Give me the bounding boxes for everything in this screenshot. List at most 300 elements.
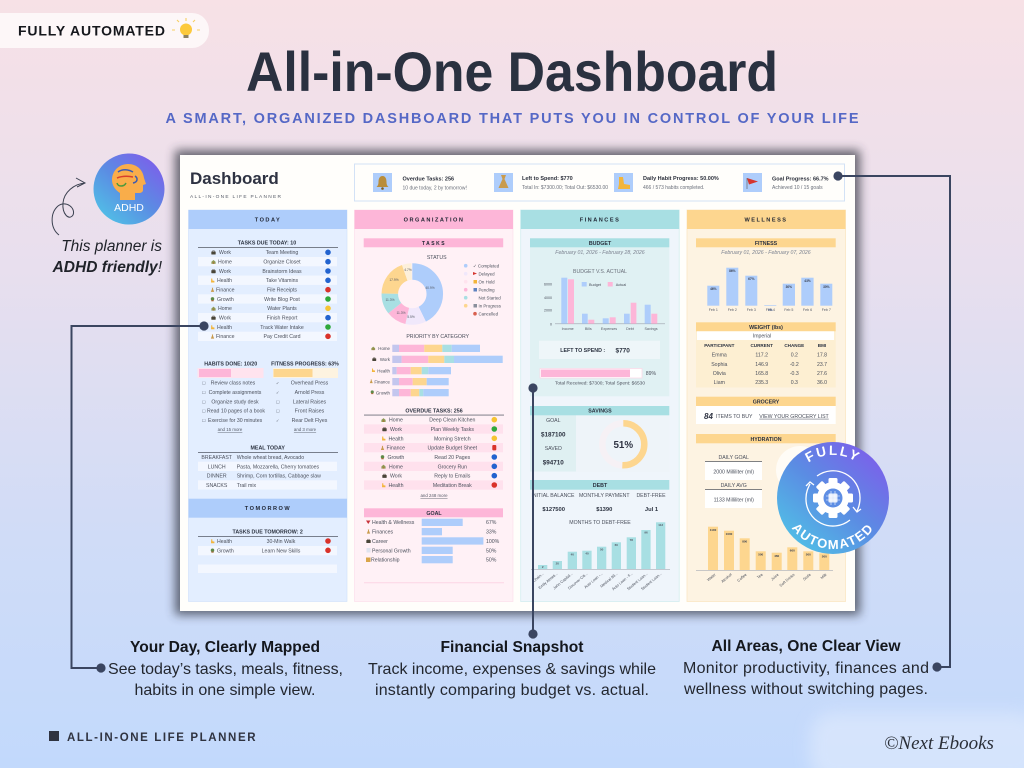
panel: summary strip: Achieved 10 / 15 goals bbox=[772, 185, 823, 191]
table: weight: 0.2 bbox=[791, 352, 798, 358]
section: savings: GOAL bbox=[546, 418, 561, 424]
table: tasks due today: Team Meeting bbox=[266, 250, 298, 256]
chart: fitness bars: 43% bbox=[804, 279, 811, 283]
chart: goal progress: 100% bbox=[486, 539, 500, 545]
table: tasks due today: Home bbox=[218, 306, 232, 312]
checklist: fitness: Rear Delt Flyes bbox=[292, 418, 328, 424]
arrow: curl pointing at ADHD badge bbox=[52, 178, 85, 235]
chart: months to debt-free bars: Discover Citi... bbox=[567, 572, 589, 591]
chart: priority by category stacked bars: Finance bbox=[374, 379, 391, 384]
heading: dashboard: Dashboard bbox=[190, 169, 279, 188]
table: tasks due today: Growth bbox=[217, 297, 234, 303]
section: fitness bbox=[696, 238, 836, 312]
chart: budget vs actual bars: Actual bbox=[616, 283, 626, 287]
chart: fitness bars: Feb 4 bbox=[766, 308, 775, 312]
table: tasks due tomorrow bbox=[198, 530, 338, 573]
section: debt: DEBT bbox=[593, 483, 608, 489]
table: overdue tasks: OVERDUE TASKS: 256 bbox=[405, 408, 463, 414]
chart: fitness bars: 46% bbox=[710, 287, 717, 291]
panel: summary strip: 466 / 573 habits completed. bbox=[643, 185, 704, 191]
table: meal today: MEAL TODAY bbox=[251, 446, 285, 452]
chart: months to debt-free bars: 2 bbox=[542, 565, 544, 569]
checklist: habits: HABITS DONE: 10/20 bbox=[204, 362, 257, 368]
chart: hydration bars: 500 bbox=[822, 554, 827, 558]
chart: hydration bars: Tea bbox=[756, 572, 764, 580]
chart: goal progress: Relationship bbox=[371, 558, 400, 564]
table: weight: CURRENT bbox=[750, 343, 773, 348]
table: tasks due tomorrow: 30-Min Walk bbox=[267, 539, 296, 545]
chart: priority by category stacked bars bbox=[370, 345, 503, 396]
icon: red flag bbox=[743, 173, 762, 192]
checklist: habits: ☐ bbox=[202, 409, 206, 414]
heading: tomorrow: TOMORROW bbox=[245, 506, 291, 512]
table: tasks due today: Health bbox=[217, 325, 232, 331]
table: overdue tasks: Update Budget Sheet bbox=[427, 446, 478, 452]
table: meal today: DINNER bbox=[207, 474, 227, 480]
table: overdue tasks: Work bbox=[390, 427, 402, 433]
legend: task status: On Hold bbox=[478, 279, 495, 284]
table: weight: 146.9 bbox=[755, 362, 768, 368]
heading: dashboard bbox=[190, 169, 282, 200]
chart: priority by category stacked bars: Growth bbox=[376, 390, 391, 395]
chart: hydration bars: 600 bbox=[790, 548, 795, 552]
chart: savings donut: 51% bbox=[613, 440, 633, 451]
legend: task status: Pending bbox=[478, 287, 495, 292]
callout: ADHD friendly: This planner is bbox=[61, 238, 162, 255]
section: hydration bbox=[696, 434, 836, 588]
table: overdue tasks: Reply to Emails bbox=[434, 474, 471, 480]
checklist: fitness: ✓ bbox=[276, 390, 279, 395]
chart: goal progress: GOAL bbox=[426, 511, 442, 517]
table: tasks due today: Work bbox=[219, 250, 231, 256]
table: weight: BMI bbox=[818, 343, 826, 348]
section: budget: BUDGET V.S. ACTUAL bbox=[573, 269, 627, 275]
panel: dashboard screenshot bbox=[180, 155, 855, 611]
section: savings: $94710 bbox=[543, 460, 564, 466]
connector: financial snapshot bbox=[528, 383, 538, 639]
chart: hydration bars: Soft Drinks bbox=[779, 573, 796, 588]
table: overdue tasks: and 248 more bbox=[420, 493, 448, 498]
chart: hydration bars: 500 bbox=[806, 552, 811, 556]
table: tasks due tomorrow: Learn New Skills bbox=[262, 548, 301, 554]
table: weight: 0.3 bbox=[791, 380, 798, 386]
chart: status donut bbox=[385, 268, 435, 319]
table: weight: 23.7 bbox=[817, 362, 827, 368]
text block: all areas, one clear view: Monitor productivity, finances and bbox=[683, 660, 929, 677]
legend: task status: Cancelled bbox=[478, 311, 499, 316]
section: savings: $187100 bbox=[541, 432, 566, 438]
chart: months to debt-free bars: Auto Loan -... bbox=[584, 572, 604, 589]
chart: fitness bars: 67% bbox=[748, 277, 755, 281]
chart: goal progress: 67% bbox=[486, 520, 497, 526]
chart: months to debt-free bars: 40 bbox=[571, 552, 574, 556]
table: weight: Olivia bbox=[713, 371, 726, 377]
checklist: fitness: ✓ bbox=[276, 418, 279, 423]
chart: hydration bars: 500 bbox=[758, 552, 764, 556]
badge: fully automated seal: AUTOMATED bbox=[792, 524, 872, 550]
chart: priority by category stacked bars: Home bbox=[378, 346, 391, 351]
table: meal today: LUNCH bbox=[208, 464, 226, 470]
table: tasks due today: Track Water Intake bbox=[260, 325, 304, 331]
chart: budget vs actual bars: Expenses bbox=[601, 327, 617, 331]
chart: fitness bars: Feb 2 bbox=[728, 308, 737, 312]
badge: fully automated: FULLY AUTOMATED bbox=[18, 22, 166, 38]
progress bar: spending: 89% bbox=[646, 371, 656, 377]
section: grocery: 84 bbox=[704, 412, 713, 421]
section: hydration: DAILY GOAL bbox=[719, 455, 749, 461]
table: tasks due today: Organize Closet bbox=[263, 260, 301, 266]
text block: financial snapshot: Financial Snapshot bbox=[441, 639, 583, 656]
table: tasks due today: Finance bbox=[216, 334, 235, 340]
chart: hydration bars: 1000 bbox=[726, 532, 733, 536]
chart: hydration bars: 1100 bbox=[710, 528, 717, 532]
section: debt: MONTHS TO DEBT-FREE bbox=[569, 520, 631, 526]
text block: your day, clearly mapped bbox=[108, 639, 343, 699]
chart: priority by category stacked bars: Health bbox=[377, 368, 391, 373]
table: overdue tasks: Meditation Break bbox=[433, 483, 472, 489]
chart: budget vs actual bars: Bills bbox=[585, 327, 592, 331]
checklist: fitness: Front Raises bbox=[295, 409, 325, 415]
chart: goal progress: Career bbox=[372, 539, 388, 545]
chart: hydration bars: 460 bbox=[774, 554, 780, 558]
heading: tomorrow bbox=[188, 499, 347, 518]
section: debt: INITIAL BALANCE bbox=[531, 493, 575, 499]
chart: budget vs actual bars: 2000 bbox=[544, 308, 552, 312]
checklist: habits: Read 10 pages of a book bbox=[207, 409, 265, 415]
chart: goal progress: Personal Growth bbox=[372, 548, 411, 554]
text block: financial snapshot: Track income, expenses & savings while bbox=[368, 661, 656, 678]
checklist: fitness: ✓ bbox=[276, 380, 279, 386]
chart: fitness bars: 86% bbox=[729, 269, 736, 273]
icon: ADHD head badge: ADHD bbox=[114, 202, 144, 214]
chart: hydration bars: Water bbox=[706, 572, 717, 582]
chart: hydration bars: 800 bbox=[742, 540, 748, 544]
section: budget bbox=[530, 238, 669, 396]
chart: months to debt-free bars: John Capital... bbox=[552, 572, 574, 590]
checklist: habits: Exercise for 30 minutes bbox=[208, 418, 263, 424]
table: weight: Liam bbox=[714, 380, 725, 386]
progress bar: spending: Total Received: $7300; Total Spent: $6530 bbox=[555, 380, 645, 386]
table: overdue tasks: Deep Clean Kitchen bbox=[429, 418, 475, 424]
chart: hydration bars: Alcohol bbox=[721, 573, 733, 584]
chart: months to debt-free bars: 40 bbox=[585, 552, 589, 556]
chart: months to debt-free bars: 96 bbox=[644, 531, 648, 535]
chart: months to debt-free bars: Medical Bil... bbox=[600, 572, 619, 589]
table: weight: 235.3 bbox=[755, 380, 768, 386]
panel: summary strip bbox=[354, 164, 844, 201]
badge: fully automated seal bbox=[777, 442, 889, 554]
checklist: fitness: Arnold Press bbox=[295, 390, 325, 396]
table: weight: WEIGHT (lbs) bbox=[749, 325, 783, 331]
table: tasks due tomorrow: Health bbox=[217, 539, 232, 545]
heading: tasks: TASKS bbox=[422, 241, 446, 247]
icon: bell bbox=[373, 173, 392, 192]
table: weight: Emma bbox=[712, 352, 727, 358]
chart: budget vs actual bars: Income bbox=[562, 327, 574, 331]
connector: day mapped bbox=[72, 321, 209, 673]
table: tasks due today: File Receipts bbox=[267, 288, 297, 294]
checklist: habits: ☐ bbox=[202, 418, 206, 423]
chart: budget vs actual bars: 6000 bbox=[544, 282, 552, 286]
chart: months to debt-free bars: Emily Almeti... bbox=[538, 572, 559, 590]
table: meal today: Trail mix bbox=[237, 483, 257, 489]
checklist: fitness bbox=[271, 362, 339, 432]
table: weight: 17.8 bbox=[817, 352, 827, 358]
chart: goal progress bbox=[364, 508, 504, 583]
section: hydration: 1133 Milliliter (ml) bbox=[714, 497, 754, 503]
chart: months to debt-free bars bbox=[531, 522, 670, 591]
panel: summary strip: Total In: $7300.00; Total Out: $6530.00 bbox=[522, 185, 608, 191]
panel: summary strip: 10 due today, 2 by tomorrow! bbox=[402, 186, 467, 192]
chart: months to debt-free bars: Auto Loan - F... bbox=[611, 572, 634, 591]
chart: status donut: 5.5% bbox=[407, 315, 415, 319]
heading: wellness: WELLNESS bbox=[744, 218, 788, 224]
watermark: next ebooks: ©Next Ebooks bbox=[884, 733, 994, 754]
chart: status donut: 4.7% bbox=[404, 268, 412, 272]
checklist: habits: ☐ bbox=[202, 380, 206, 386]
table: meal today: Whole wheat bread, Avocado bbox=[237, 455, 304, 461]
checklist: habits bbox=[198, 362, 265, 432]
stat: left to spend: LEFT TO SPEND : bbox=[560, 348, 605, 354]
icon: light bulb bbox=[172, 18, 200, 38]
chart: budget vs actual bars: Debt bbox=[626, 327, 634, 331]
chart: status donut: 11.3% bbox=[385, 298, 395, 302]
table: overdue tasks: Home bbox=[389, 418, 403, 424]
chart: months to debt-free bars: 20 bbox=[556, 562, 559, 566]
chart: months to debt-free bars: 78 bbox=[630, 538, 633, 542]
section: grocery bbox=[696, 397, 836, 424]
section: debt: $1390 bbox=[596, 507, 612, 513]
table: overdue tasks: Read 20 Pages bbox=[434, 455, 471, 461]
table: overdue tasks: Plan Weekly Tasks bbox=[431, 427, 474, 433]
text block: all areas, one clear view: wellness without switching pages. bbox=[683, 681, 928, 698]
table: overdue tasks: Growth bbox=[388, 455, 404, 461]
section: savings: SAVED bbox=[545, 446, 562, 452]
chart: fitness bars: Feb 1 bbox=[709, 308, 718, 312]
heading: today: TODAY bbox=[255, 218, 281, 224]
checklist: habits: Complete assignments bbox=[209, 390, 262, 396]
table: weight: PARTICIPANT bbox=[704, 343, 735, 348]
section: budget: BUDGET bbox=[589, 241, 612, 247]
panel: organization: STATUS bbox=[427, 255, 447, 261]
panel: summary strip: Left to Spend: $770 bbox=[522, 176, 573, 182]
table: overdue tasks: Health bbox=[388, 483, 404, 489]
panel: summary strip: Daily Habit Progress: 50.00% bbox=[643, 176, 719, 182]
callout: ADHD friendly: ADHD friendly! bbox=[52, 259, 163, 276]
text block: your day, clearly mapped: See today’s tasks, meals, fitness, bbox=[108, 661, 343, 678]
chart: budget vs actual bars: 0 bbox=[550, 322, 552, 326]
table: weight: -0.2 bbox=[790, 362, 799, 368]
panel: today bbox=[188, 210, 347, 602]
table: overdue tasks: Work bbox=[390, 474, 402, 480]
section: debt: Jul 1 bbox=[645, 507, 659, 513]
table: tasks due today: Brainstorm Ideas bbox=[262, 269, 302, 275]
chart: months to debt-free bars: 113 bbox=[658, 523, 663, 527]
table: tasks due today: Pay Credit Card bbox=[264, 334, 301, 340]
chart: hydration bars: Juice bbox=[770, 573, 780, 581]
table: overdue tasks: Morning Stretch bbox=[434, 436, 471, 442]
chart: goal progress: Finances bbox=[372, 530, 393, 536]
panel: wellness bbox=[687, 210, 846, 602]
heading: finances: FINANCES bbox=[580, 218, 620, 224]
section: hydration: HYDRATION bbox=[750, 437, 782, 443]
panel: dashboard screenshot shadow bbox=[175, 150, 860, 615]
panel: organization: PRIORITY BY CATEGORY bbox=[406, 334, 470, 340]
chart: months to debt-free bars: Student Loan... bbox=[640, 572, 663, 591]
table: overdue tasks bbox=[364, 408, 504, 498]
section: fitness: February 01, 2026 - February 07, 2026 bbox=[721, 250, 811, 256]
section: debt: MONTHLY PAYMENT bbox=[579, 493, 630, 499]
chart: months to debt-free bars: 60 bbox=[615, 543, 618, 547]
progress bar: spending bbox=[540, 368, 656, 386]
chart: status donut: 17.9% bbox=[389, 278, 399, 282]
text block: financial snapshot bbox=[368, 639, 656, 699]
chart: budget vs actual bars: Savings bbox=[644, 327, 658, 331]
section: debt bbox=[530, 480, 670, 591]
badge: fully automated seal: FULLY bbox=[804, 446, 860, 462]
checklist: fitness: ☐ bbox=[276, 409, 280, 414]
chart: goal progress: 50% bbox=[486, 548, 497, 554]
legend: task status: Not Started bbox=[478, 295, 501, 300]
section: grocery: GROCERY bbox=[753, 400, 780, 406]
chart: status donut: 40.9% bbox=[425, 286, 435, 290]
checklist: habits: Review class notes bbox=[211, 380, 256, 386]
chart: fitness bars: Feb 3 bbox=[747, 308, 756, 312]
text block: all areas, one clear view bbox=[683, 638, 929, 698]
table: meal today: Pasta, Mozzarella, Cherry tomatoes bbox=[237, 464, 320, 470]
chart: hydration bars: Coffee bbox=[737, 573, 748, 583]
section: savings: SAVINGS bbox=[588, 409, 612, 415]
callout: ADHD friendly bbox=[52, 238, 163, 276]
table: weight: -0.3 bbox=[790, 371, 799, 377]
chart: goal progress: Health & Wellness bbox=[372, 520, 415, 526]
legend: task status: ✓ Completed bbox=[473, 263, 500, 268]
text block: financial snapshot: instantly comparing budget vs. actual. bbox=[375, 682, 649, 699]
section: fitness: FITNESS bbox=[755, 241, 778, 247]
table: weight: 117.2 bbox=[755, 352, 768, 358]
section: debt: $127500 bbox=[542, 507, 565, 513]
table: tasks due today: Home bbox=[218, 260, 232, 266]
chart: hydration bars bbox=[696, 527, 833, 588]
table: tasks due today bbox=[198, 240, 338, 341]
table: tasks due today: Water Plants bbox=[267, 306, 297, 312]
table: meal today: SNACKS bbox=[206, 483, 228, 489]
section: hydration: DAILY AVG bbox=[721, 483, 747, 489]
icon: gear with cycle arrows bbox=[806, 471, 861, 526]
chart: fitness bars: 30% bbox=[823, 285, 830, 289]
legend: task status bbox=[464, 263, 502, 316]
icon: money bag bbox=[494, 173, 513, 192]
table: tasks due today: Take Vitamins bbox=[266, 278, 298, 284]
stat: left to spend bbox=[539, 341, 660, 359]
chart: fitness bars: Feb 5 bbox=[784, 308, 793, 312]
table: weight: Imperial bbox=[753, 334, 771, 340]
checklist: fitness: Lateral Raises bbox=[293, 399, 326, 405]
table: weight bbox=[696, 322, 836, 388]
table: tasks due today: Work bbox=[219, 269, 231, 275]
panel: summary strip: Overdue Tasks: 256 bbox=[402, 176, 454, 182]
text block: your day, clearly mapped: habits in one simple view. bbox=[134, 682, 316, 699]
checklist: fitness: Overhead Press bbox=[291, 380, 329, 386]
chart: goal progress: 50% bbox=[486, 558, 497, 564]
table: overdue tasks: Finance bbox=[386, 446, 405, 452]
table: weight: CHANGE bbox=[784, 343, 804, 348]
table: weight: Sophia bbox=[711, 362, 727, 368]
title: All-in-One Dashboard bbox=[246, 40, 778, 103]
section: grocery: ITEMS TO BUY bbox=[716, 414, 753, 420]
table: tasks due tomorrow: Growth bbox=[217, 548, 234, 554]
icon: flexed arm bbox=[614, 173, 633, 192]
chart: fitness bars: Feb 6 bbox=[803, 308, 812, 312]
table: overdue tasks: Grocery Run bbox=[438, 464, 467, 470]
chart: fitness bars bbox=[707, 268, 832, 312]
heading: tasks bbox=[364, 238, 503, 247]
checklist: habits: Organize study desk bbox=[211, 399, 259, 405]
heading: dashboard: ALL-IN-ONE LIFE PLANNER bbox=[190, 194, 282, 200]
section: hydration: 2000 Milliliter (ml) bbox=[713, 469, 754, 475]
text block: your day, clearly mapped: Your Day, Clearly Mapped bbox=[130, 639, 320, 656]
table: overdue tasks: Home bbox=[389, 464, 403, 470]
checklist: fitness: ☐ bbox=[276, 399, 280, 404]
badge: fully automated bbox=[0, 13, 209, 48]
text block: all areas, one clear view: All Areas, One Clear View bbox=[712, 638, 901, 655]
connector: all areas bbox=[833, 171, 950, 672]
chart: priority by category stacked bars: Work bbox=[380, 357, 391, 362]
table: meal today: Shrimp, Corn tortillas, Cabbage slaw bbox=[237, 474, 321, 480]
table: weight: 165.8 bbox=[755, 371, 768, 377]
chart: hydration bars: Milk bbox=[820, 573, 828, 580]
table: overdue tasks: Health bbox=[388, 436, 404, 442]
panel: summary strip: Goal Progress: 66.7% bbox=[772, 176, 829, 182]
table: tasks due today: TASKS DUE TODAY: 10 bbox=[238, 240, 296, 246]
stat: left to spend: $770 bbox=[615, 348, 630, 354]
heading: organization: ORGANIZATION bbox=[404, 218, 464, 224]
panel: finances bbox=[521, 210, 679, 602]
table: tasks due today: Health bbox=[217, 278, 232, 284]
footer: planner label: ALL-IN-ONE LIFE PLANNER bbox=[67, 732, 257, 744]
section: savings bbox=[530, 406, 669, 472]
checklist: habits: and 15 more bbox=[218, 427, 243, 432]
checklist: habits: ☐ bbox=[202, 390, 206, 395]
chart: months to debt-free bars: 50 bbox=[600, 548, 604, 552]
table: tasks due today: Finish Report bbox=[267, 316, 298, 322]
chart: status donut: 11.3% bbox=[396, 311, 406, 315]
table: tasks due today: Write Blog Post bbox=[264, 297, 300, 303]
table: weight: 36.0 bbox=[817, 380, 827, 386]
chart: goal progress: 33% bbox=[486, 530, 497, 536]
section: grocery: VIEW YOUR GROCERY LIST bbox=[759, 414, 830, 420]
chart: budget vs actual bars: Budget bbox=[589, 283, 602, 287]
section: budget: February 01, 2026 - February 28, 2026 bbox=[555, 250, 645, 256]
chart: budget vs actual bars: 4000 bbox=[544, 296, 552, 300]
section: debt: DEBT-FREE bbox=[636, 493, 666, 499]
chart: months to debt-free bars: Student Loan... bbox=[626, 572, 649, 591]
chart: fitness bars: 0% bbox=[768, 308, 773, 312]
subtitle: A SMART, ORGANIZED DASHBOARD THAT PUTS YOU IN CONTROL OF YOUR LIFE bbox=[166, 111, 859, 127]
chart: fitness bars: 30% bbox=[786, 285, 792, 289]
table: tasks due tomorrow: TASKS DUE TOMORROW: 2 bbox=[233, 530, 303, 536]
table: tasks due today: Finance bbox=[216, 288, 235, 294]
legend: task status: In Progress bbox=[478, 303, 502, 308]
chart: hydration bars: Soda bbox=[802, 572, 812, 581]
checklist: habits: ☐ bbox=[202, 399, 206, 404]
table: weight: 27.6 bbox=[817, 371, 827, 377]
legend: task status: Delayed bbox=[478, 271, 495, 276]
panel: organization bbox=[354, 210, 513, 602]
table: tasks due today: Work bbox=[219, 316, 231, 322]
checklist: fitness: FITNESS PROGRESS: 63% bbox=[271, 362, 339, 368]
chart: budget vs actual bars bbox=[544, 278, 665, 331]
